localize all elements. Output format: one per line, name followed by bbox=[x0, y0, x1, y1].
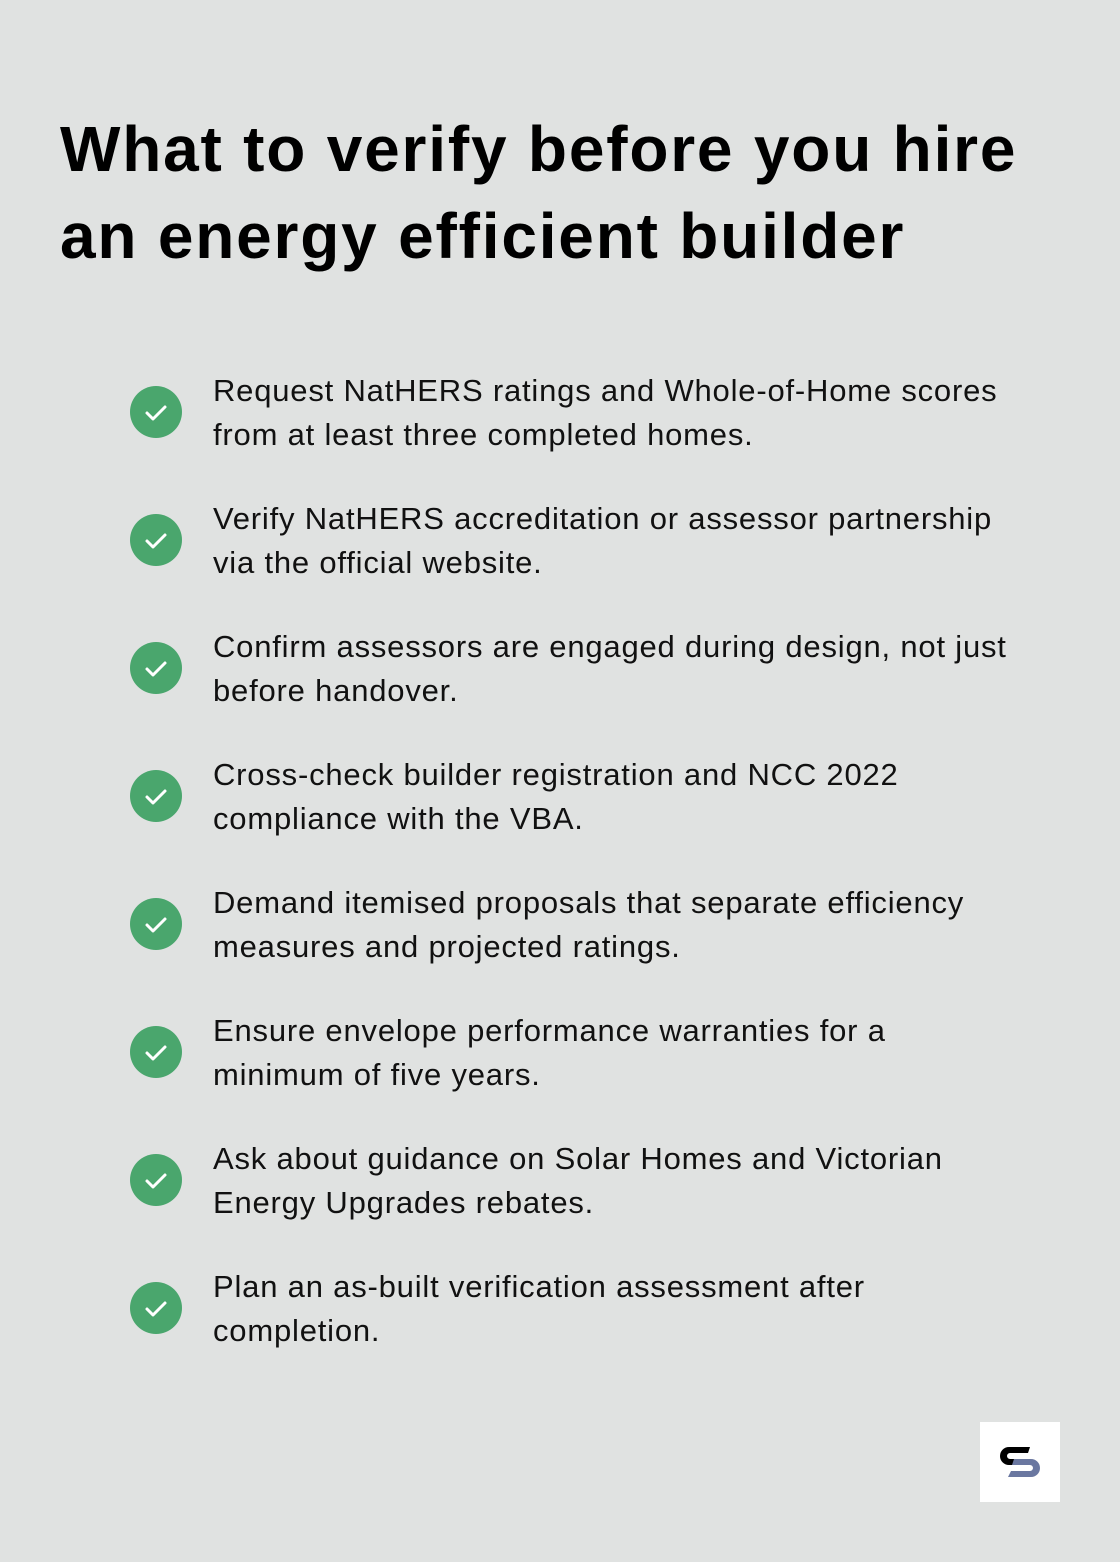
text: via the official website. bbox=[213, 545, 543, 580]
title bbox=[60, 113, 1017, 272]
text: Confirm assessors are engaged during design, not just bbox=[213, 629, 1007, 664]
title: an energy efficient builder bbox=[60, 200, 905, 272]
text: measures and projected ratings. bbox=[213, 929, 681, 964]
icon: check bbox=[130, 386, 182, 438]
text bbox=[213, 373, 997, 452]
checklist item 4 bbox=[130, 757, 899, 836]
text bbox=[213, 1141, 943, 1220]
text bbox=[213, 501, 992, 580]
text: Plan an as-built verification assessment after bbox=[213, 1269, 865, 1304]
text: Energy Upgrades rebates. bbox=[213, 1185, 594, 1220]
text bbox=[213, 885, 964, 964]
icon: check bbox=[130, 898, 182, 950]
icon: check bbox=[130, 1026, 182, 1078]
checklist item 7 bbox=[130, 1141, 943, 1220]
text: Cross-check builder registration and NCC 2022 bbox=[213, 757, 899, 792]
text bbox=[213, 757, 899, 836]
icon: check bbox=[130, 1282, 182, 1334]
checklist item 8 bbox=[130, 1269, 865, 1348]
text: compliance with the VBA. bbox=[213, 801, 584, 836]
icon: check bbox=[130, 642, 182, 694]
checklist item 3 bbox=[130, 629, 1007, 708]
text: Demand itemised proposals that separate efficiency bbox=[213, 885, 964, 920]
text: before handover. bbox=[213, 673, 458, 708]
checklist item 6 bbox=[130, 1013, 886, 1092]
text: minimum of five years. bbox=[213, 1057, 541, 1092]
text: completion. bbox=[213, 1313, 380, 1348]
title: What to verify before you hire bbox=[60, 113, 1017, 185]
icon: check bbox=[130, 514, 182, 566]
checklist item 5 bbox=[130, 885, 964, 964]
text: Ensure envelope performance warranties for a bbox=[213, 1013, 886, 1048]
text: Ask about guidance on Solar Homes and Victorian bbox=[213, 1141, 943, 1176]
text bbox=[213, 1269, 865, 1348]
logo bbox=[980, 1422, 1060, 1502]
checklist item 1 bbox=[130, 373, 997, 452]
text: Verify NatHERS accreditation or assessor partnership bbox=[213, 501, 992, 536]
text: Request NatHERS ratings and Whole-of-Home scores bbox=[213, 373, 997, 408]
text bbox=[213, 1013, 886, 1092]
icon: check bbox=[130, 1154, 182, 1206]
text bbox=[213, 629, 1007, 708]
checklist item 2 bbox=[130, 501, 992, 580]
icon: check bbox=[130, 770, 182, 822]
text: from at least three completed homes. bbox=[213, 417, 754, 452]
